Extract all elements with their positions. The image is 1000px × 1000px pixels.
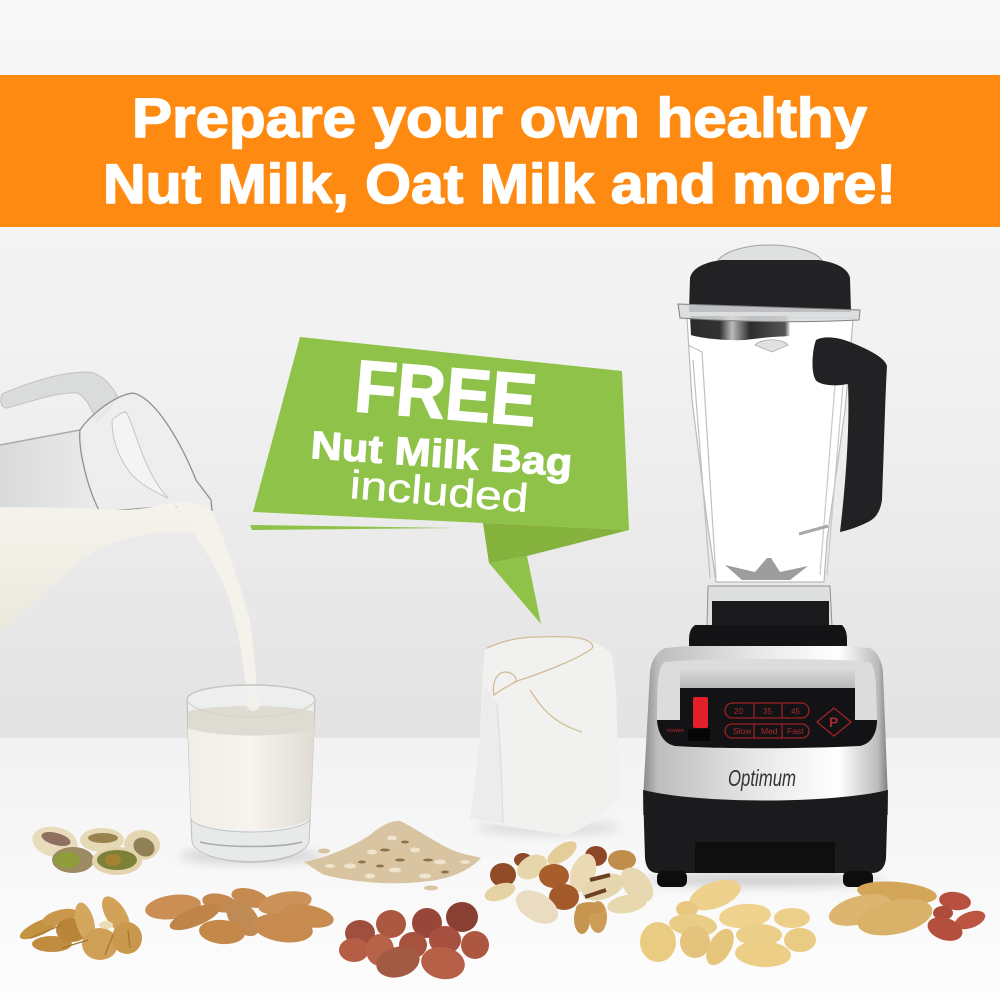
title: Prepare your own healthy (132, 86, 867, 149)
panel button labels: P (829, 714, 838, 730)
jar (687, 318, 853, 582)
milk in glass (188, 728, 314, 830)
milk splash drop (246, 695, 260, 711)
panel button labels: 35 (763, 707, 772, 716)
switch housing (688, 729, 710, 741)
power switch (693, 697, 708, 728)
cashews (640, 874, 816, 970)
jug shoulder glass (0, 430, 100, 512)
glass of milk (179, 685, 323, 864)
jar right edge reflection (820, 385, 843, 575)
bubble text: Nut Milk Bag: Nut Milk Bag (309, 424, 574, 485)
title: Nut Milk, Oat Milk and more! (103, 152, 896, 215)
jar left edge reflection (688, 345, 716, 578)
background wall (0, 0, 1000, 738)
title (103, 86, 896, 215)
power label: POWER (667, 728, 685, 733)
bag string (487, 637, 593, 732)
bubble fold (483, 523, 629, 563)
jug neck top edge (0, 430, 80, 445)
green speech bubble (250, 337, 629, 624)
jar handle (812, 337, 887, 532)
hazelnuts (339, 902, 489, 983)
top silver plate (657, 659, 877, 720)
glass base (191, 820, 310, 862)
almonds (144, 884, 335, 946)
bag body (470, 637, 622, 835)
jar handle strap (799, 526, 828, 534)
lid (689, 260, 851, 312)
bag fold line (497, 703, 503, 823)
bubble text: included: included (348, 463, 530, 521)
glass rim (188, 702, 314, 717)
nut milk bag (470, 637, 622, 835)
panel buttons (725, 703, 851, 738)
panel button labels: Fast (787, 726, 804, 736)
glass base shine (200, 842, 302, 846)
jug handle (1, 372, 118, 422)
bubble lower sliver (250, 525, 457, 530)
jar dark band under lid (690, 316, 790, 340)
jar base ring (689, 625, 847, 652)
jug pouring milk (0, 372, 258, 700)
mixed nuts (482, 837, 660, 934)
panel button labels: 45 (791, 707, 800, 716)
bubble text: FREE: FREE (352, 344, 540, 442)
left foot (657, 871, 687, 887)
peanuts (825, 879, 988, 945)
control panel (657, 688, 877, 748)
milk surface (188, 706, 314, 738)
blender floor shadow (645, 873, 885, 887)
blade assembly (725, 558, 808, 580)
pistachios (29, 823, 160, 875)
jar rim (678, 304, 860, 322)
panel button labels: Slow (733, 726, 752, 736)
jar collar (707, 586, 832, 626)
right foot (843, 871, 873, 887)
panel button labels: Med (761, 726, 778, 736)
bag lower shade (470, 685, 503, 823)
panel button labels (733, 707, 838, 736)
bubble tail (489, 556, 541, 624)
black foot (643, 790, 888, 873)
jar spout dent (755, 340, 788, 352)
collar dark centre (712, 601, 829, 627)
walnuts (17, 892, 142, 960)
foot recess (695, 842, 835, 873)
milk stream (173, 503, 258, 700)
brand name: Optimum (728, 765, 796, 791)
oats pile (304, 821, 481, 890)
bubble shape (253, 337, 629, 530)
jug mouth (80, 393, 212, 512)
glass body (187, 685, 315, 862)
floor (0, 738, 1000, 1000)
panel button labels: 20 (734, 707, 743, 716)
milk inside jug (0, 503, 196, 631)
orange title banner (0, 75, 1000, 227)
lid cap (717, 245, 823, 262)
jug inner rim (112, 412, 168, 498)
recessed inner plate (680, 670, 855, 690)
blender (643, 245, 888, 887)
silver base (643, 646, 888, 815)
glass shadow (179, 848, 323, 864)
bag shadow (476, 821, 620, 835)
